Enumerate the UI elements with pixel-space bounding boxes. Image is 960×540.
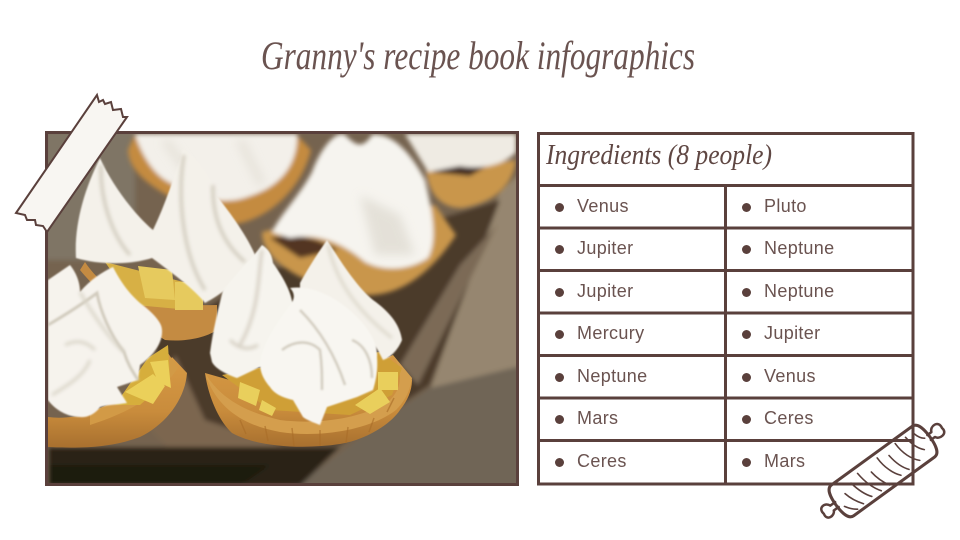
right column items: Neptune: [764, 281, 835, 301]
front left tart: [48, 357, 187, 448]
blurred back tarts: [128, 134, 516, 295]
left column items: Mercury: [577, 323, 644, 343]
back left tart: [80, 262, 217, 341]
right column items: [742, 196, 835, 471]
table grid: [537, 132, 914, 486]
left column items: Mars: [577, 408, 618, 428]
photo: meringue tarts on a wooden board: [45, 131, 519, 486]
left column items: Neptune: [577, 366, 648, 386]
right column items: Neptune: [764, 238, 835, 258]
wooden table and board: [40, 125, 525, 490]
left column items: Ceres: [577, 451, 627, 471]
right column items: Ceres: [764, 408, 814, 428]
right column items: Venus: [764, 366, 816, 386]
left column items: Jupiter: [577, 238, 633, 258]
title: Granny's recipe book infographics: [261, 33, 695, 78]
left column items: Jupiter: [577, 281, 633, 301]
right column items: Pluto: [764, 196, 807, 216]
left column items: [555, 196, 648, 471]
front centre tart: [205, 355, 412, 447]
photo frame: [46, 132, 518, 484]
right column items: Jupiter: [764, 323, 820, 343]
washi tape: [14, 92, 129, 232]
ingredients table: [537, 132, 914, 486]
left column items: Venus: [577, 196, 629, 216]
right column items: Mars: [764, 451, 805, 471]
